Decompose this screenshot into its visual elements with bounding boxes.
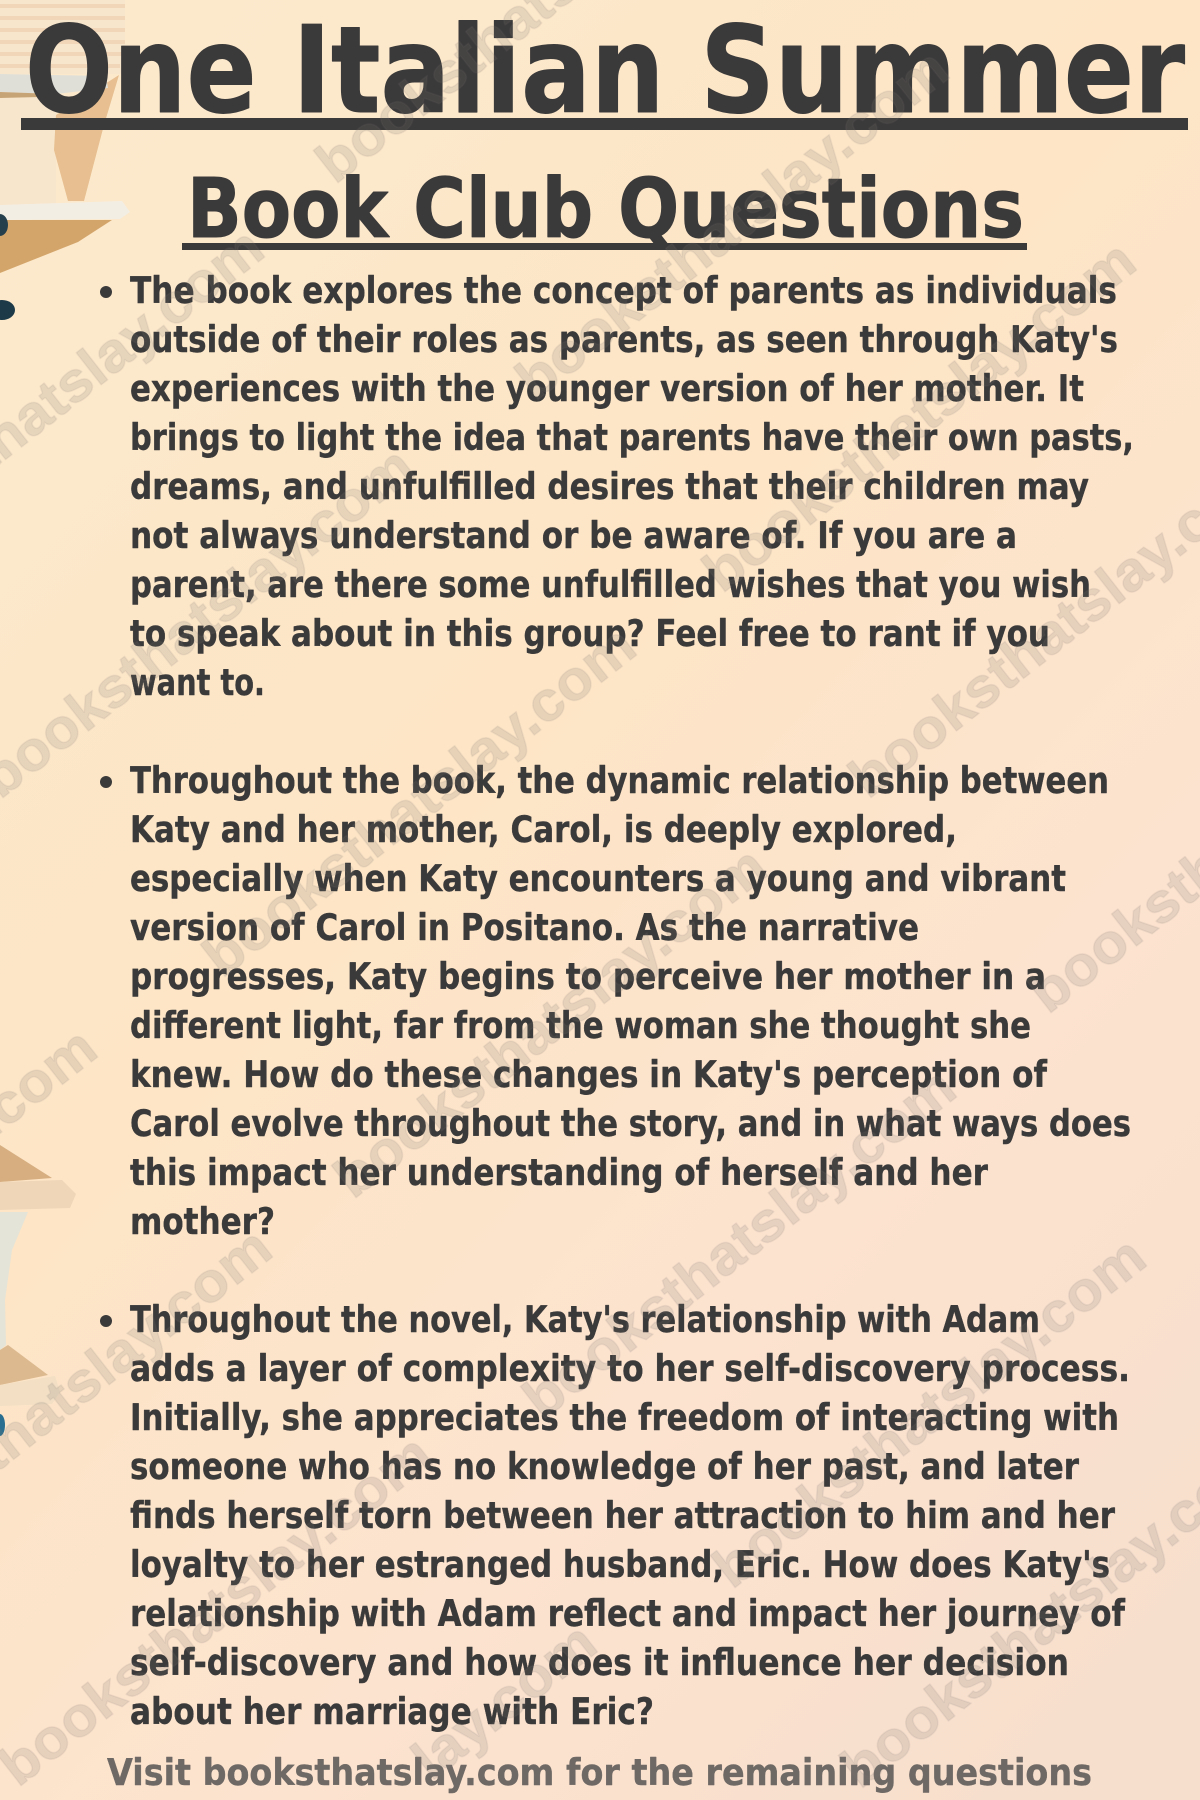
watermarks: booksthatslay.com	[701, 1224, 1157, 1599]
question 1: to speak about in this group? Feel free to rant if you	[130, 612, 1050, 655]
question 3: self-discovery and how does it influence her decision	[130, 1641, 1069, 1684]
question 2: this impact her understanding of herself and her	[130, 1151, 988, 1194]
question 2: mother?	[130, 1200, 275, 1243]
subtitle: Book Club Questions	[187, 162, 1024, 257]
question 2: knew. How do these changes in Katy's perception of	[130, 1053, 1048, 1096]
question 3	[100, 1298, 1130, 1733]
question 2: version of Carol in Positano. As the narrative	[130, 906, 919, 949]
watermarks: booksthatslay.com	[691, 228, 1147, 603]
question 2: progresses, Katy begins to perceive her mother in a	[130, 955, 1046, 998]
watermarks: booksthatslay.com	[511, 1055, 967, 1430]
watermarks: booksthatslay.com	[504, 36, 960, 411]
question 1: not always understand or be aware of. If you are a	[130, 514, 1017, 557]
question 3: about her marriage with Eric?	[130, 1690, 654, 1733]
question 1	[100, 269, 1134, 704]
question 2: Katy and her mother, Carol, is deeply explored,	[130, 808, 957, 851]
watermarks: booksthatslay.com	[191, 613, 647, 988]
question 3: Throughout the novel, Katy's relationship with Adam	[130, 1298, 1040, 1341]
question 2	[100, 759, 1131, 1243]
decorative shelves: bottom left	[0, 1145, 76, 1436]
decorative shelves: top left	[0, 0, 130, 320]
watermarks: booksthatslay.com	[322, 834, 778, 1209]
watermarks: lay.com	[400, 1609, 608, 1791]
question 1: want to.	[130, 661, 265, 704]
footer call to action: Visit booksthatslay.com for the remaining questions	[107, 1751, 1092, 1794]
question 2: different light, far from the woman she thought she	[130, 1004, 1031, 1047]
